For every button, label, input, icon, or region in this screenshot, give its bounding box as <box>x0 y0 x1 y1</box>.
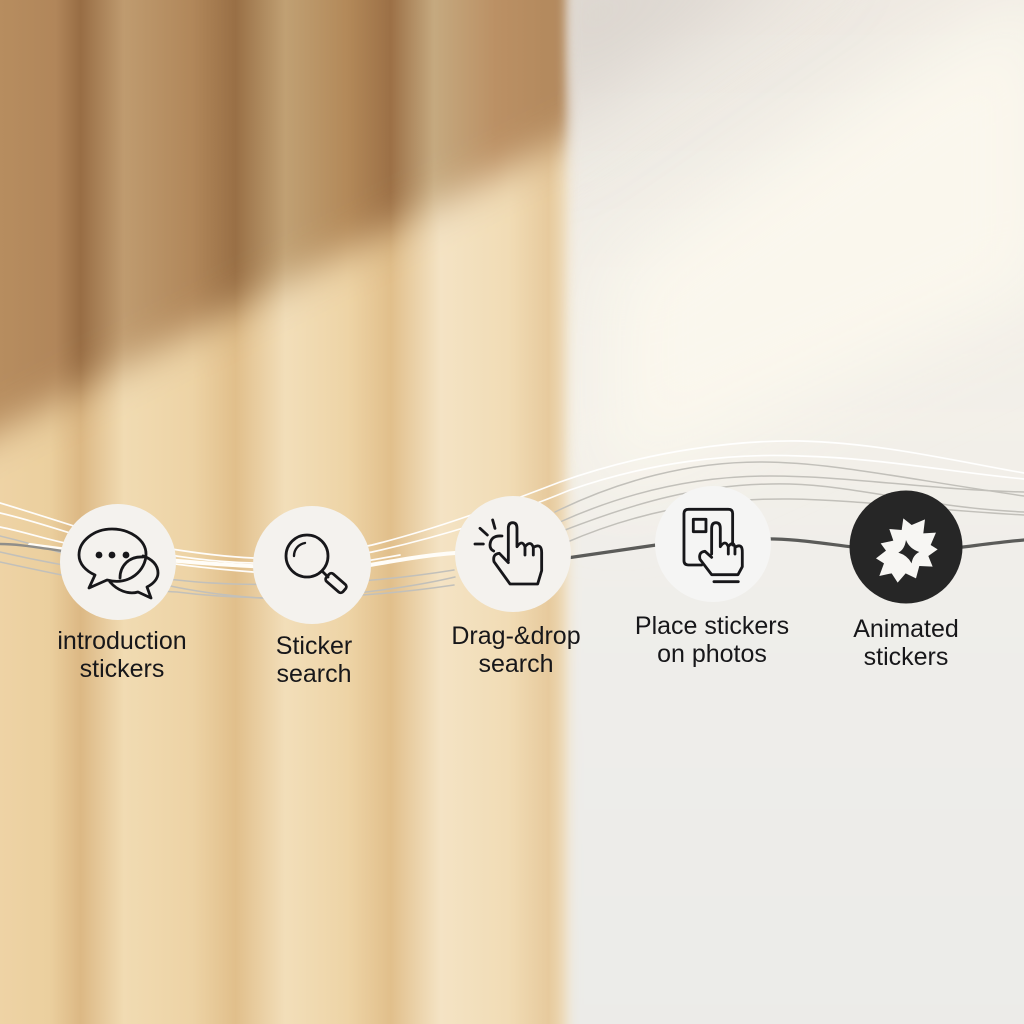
label: place stickers on photos <box>635 612 789 668</box>
label: animated stickers: Animated <box>853 615 959 643</box>
icon: starburst badge <box>850 490 962 604</box>
label: introduction stickers: stickers <box>80 654 164 682</box>
main white wire <box>30 545 470 567</box>
label: drag and drop search: Drag-&drop <box>451 622 581 650</box>
label: introduction stickers: introduction <box>57 627 187 655</box>
white strands <box>0 441 1024 572</box>
step 1: introduction stickers <box>57 504 187 682</box>
step 4: place stickers on photos <box>635 486 789 668</box>
label: drag and drop search <box>451 622 581 678</box>
main dark wire <box>0 544 70 552</box>
label: animated stickers: stickers <box>864 642 948 670</box>
label: animated stickers <box>853 615 959 670</box>
label: sticker search: search <box>276 660 352 688</box>
step 5: animated stickers <box>850 490 962 670</box>
step 3: drag and drop search <box>451 496 581 678</box>
label: introduction stickers <box>57 627 187 682</box>
label: sticker search: Sticker <box>276 632 352 660</box>
icon: tapping hand <box>455 496 571 612</box>
icon: chat bubbles <box>60 504 176 620</box>
label: drag and drop search: search <box>478 650 554 678</box>
grey upper strands <box>0 462 1024 598</box>
label: place stickers on photos: on photos <box>657 640 767 668</box>
label: place stickers on photos: Place stickers <box>635 612 789 640</box>
label: sticker search <box>276 632 352 688</box>
icon: hand on photo card <box>655 486 771 602</box>
icon: magnifying glass <box>253 506 371 624</box>
step 2: sticker search <box>253 506 371 688</box>
